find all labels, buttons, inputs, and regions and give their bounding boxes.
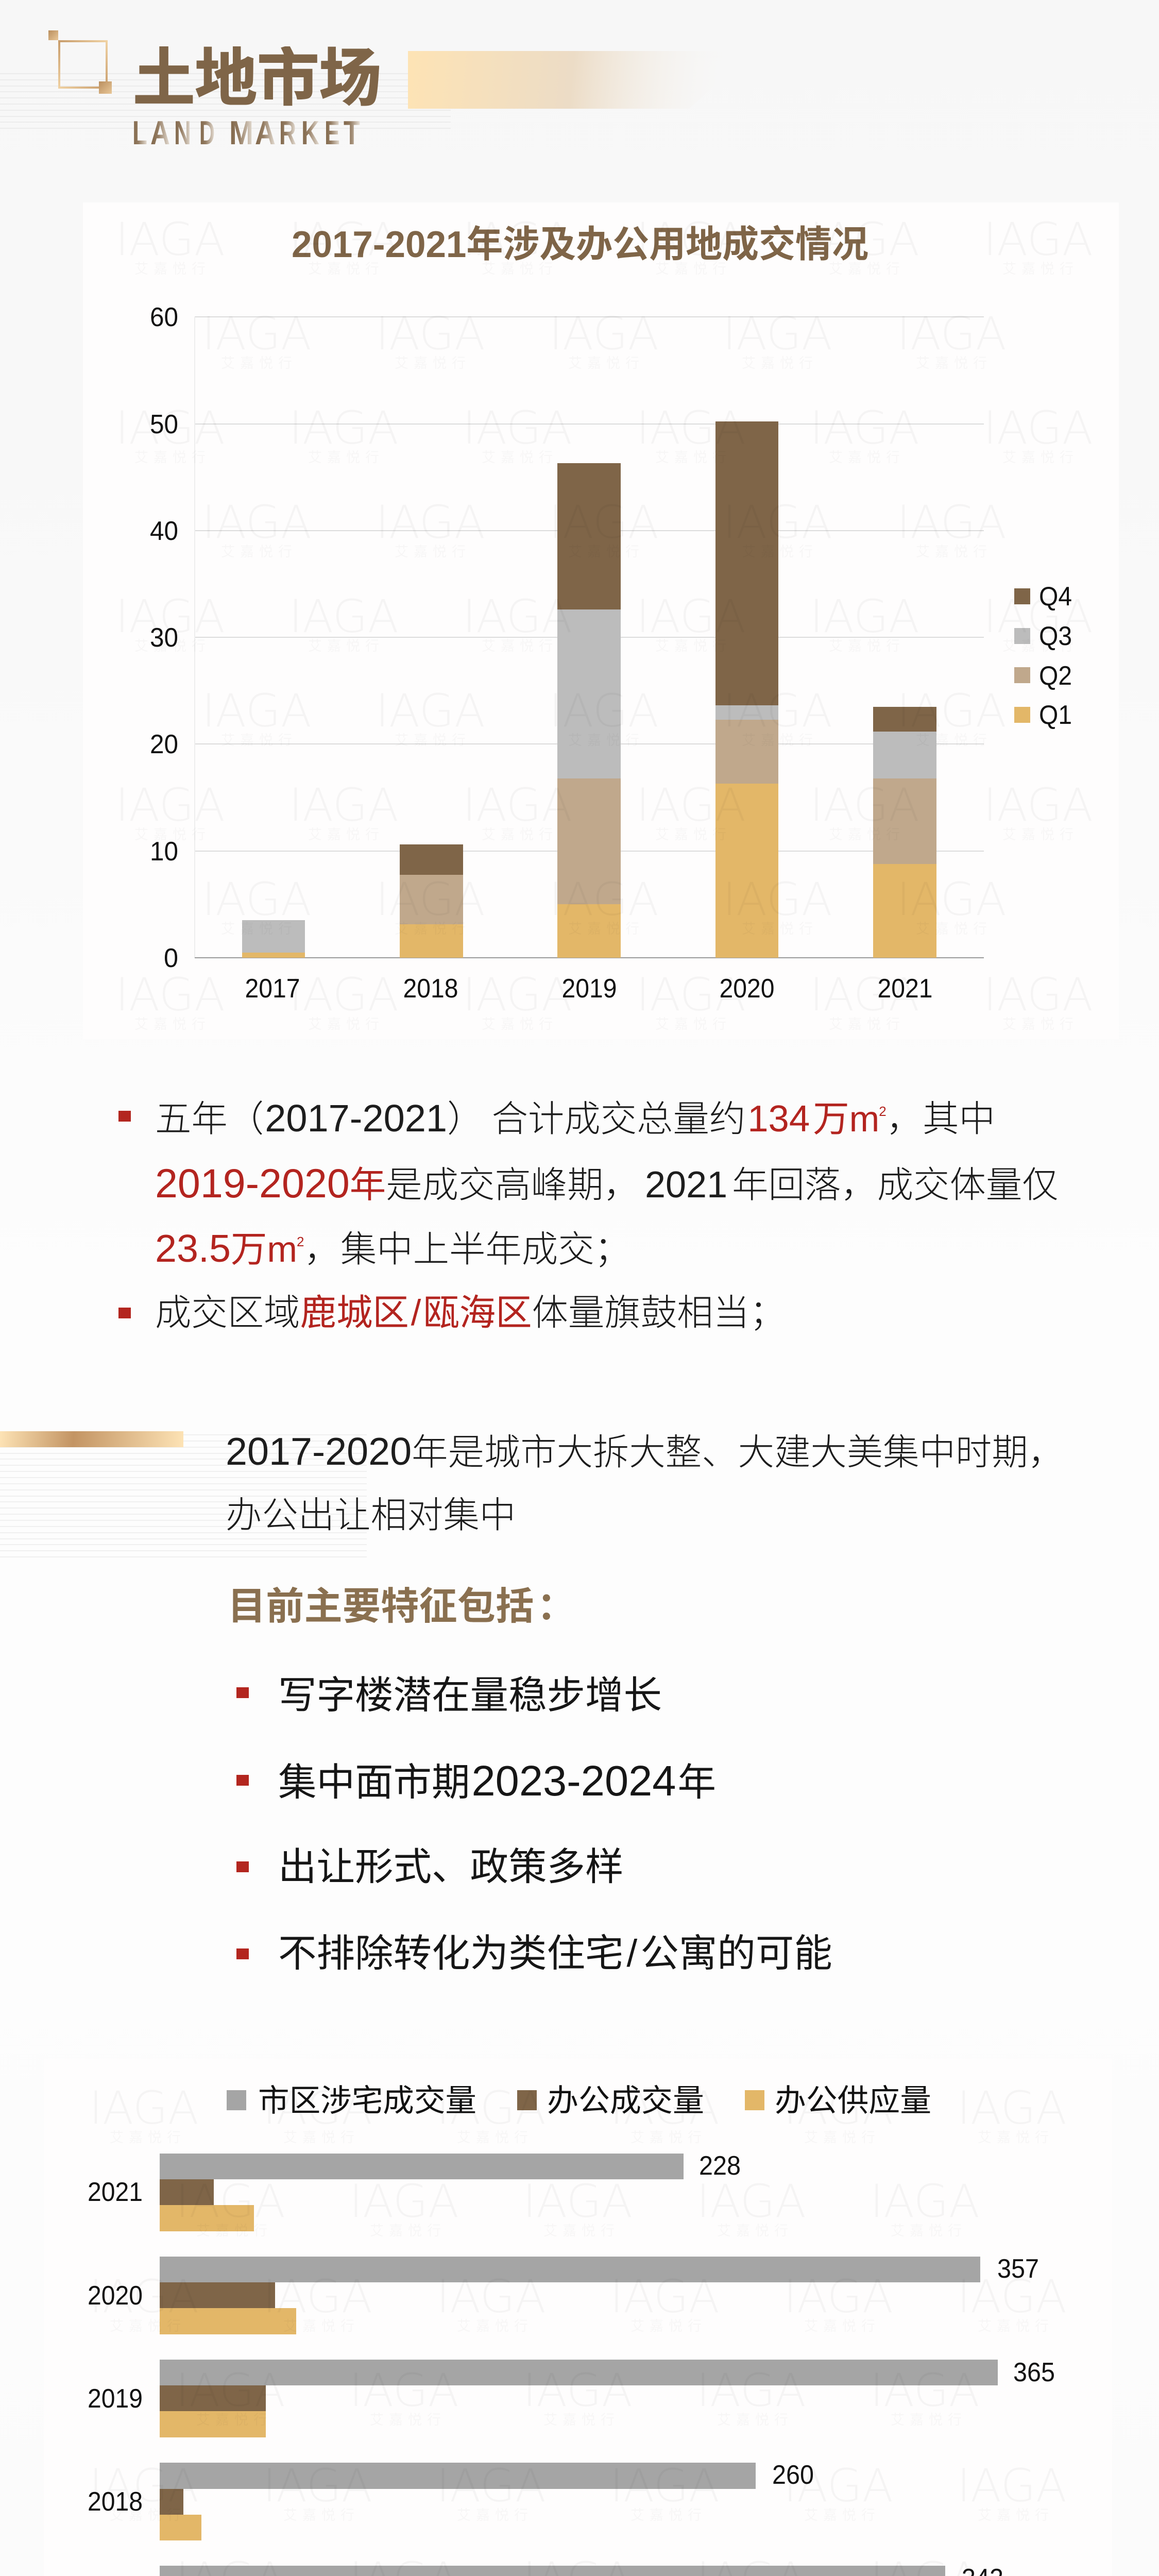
watermark: 艾嘉悦行: [829, 827, 905, 842]
watermark: IAGA: [723, 307, 832, 360]
watermark: 艾嘉悦行: [916, 921, 992, 937]
text block: intro: [226, 1430, 1064, 1535]
watermark: IAGA: [202, 873, 312, 926]
watermark: IAGA: [723, 684, 832, 737]
y axis labels: 30: [150, 623, 178, 653]
watermark: 艾嘉悦行: [395, 355, 471, 371]
bullet: [118, 1308, 131, 1318]
watermark: 艾嘉悦行: [568, 355, 644, 371]
watermark: 艾嘉悦行: [395, 544, 471, 560]
watermark: 艾嘉悦行: [655, 638, 731, 654]
list: main features: 写字楼潜在量稳步增长: [278, 1674, 662, 1717]
watermark: IAGA: [636, 968, 746, 1021]
watermark: IAGA: [783, 2081, 893, 2134]
watermark: 艾嘉悦行: [1002, 638, 1079, 654]
watermark: IAGA: [636, 778, 746, 832]
watermark: [89, 2081, 1067, 2576]
watermark: 艾嘉悦行: [110, 2507, 186, 2523]
watermark: IAGA: [983, 968, 1093, 1021]
watermark: IAGA: [549, 307, 659, 360]
watermark: IAGA: [983, 590, 1093, 643]
watermark: 艾嘉悦行: [655, 827, 731, 842]
watermark: 艾嘉悦行: [221, 355, 297, 371]
watermark: 艾嘉悦行: [568, 733, 644, 748]
watermark: [115, 213, 1093, 1032]
watermark: 艾嘉悦行: [308, 638, 384, 654]
watermark: IAGA: [289, 401, 399, 454]
y axis labels: 60: [150, 302, 178, 332]
watermark: 艾嘉悦行: [655, 450, 731, 465]
watermark: 艾嘉悦行: [742, 733, 818, 748]
x axis labels: 2018: [403, 974, 458, 1004]
watermark: IAGA: [115, 401, 225, 454]
watermark: 艾嘉悦行: [308, 1016, 384, 1032]
value labels: 228: [699, 2151, 741, 2181]
watermark: IAGA: [983, 401, 1093, 454]
watermark: IAGA: [263, 2081, 372, 2134]
watermark: 艾嘉悦行: [630, 2507, 707, 2523]
watermark: IAGA: [636, 401, 746, 454]
watermark: 艾嘉悦行: [395, 921, 471, 937]
watermark: 艾嘉悦行: [655, 1016, 731, 1032]
watermark: 艾嘉悦行: [829, 1016, 905, 1032]
watermark: 艾嘉悦行: [829, 261, 905, 277]
watermark: 艾嘉悦行: [717, 2223, 793, 2239]
watermark: IAGA: [636, 213, 746, 266]
watermark: IAGA: [289, 968, 399, 1021]
watermark: IAGA: [463, 590, 572, 643]
watermark: IAGA: [376, 496, 485, 549]
watermark: IAGA: [463, 401, 572, 454]
watermark: 艾嘉悦行: [742, 355, 818, 371]
watermark: 艾嘉悦行: [804, 2318, 880, 2334]
watermark: IAGA: [89, 2270, 199, 2323]
watermark: 艾嘉悦行: [742, 921, 818, 937]
x axis labels: [245, 974, 932, 1004]
watermark: IAGA: [89, 2459, 199, 2512]
watermark: 艾嘉悦行: [283, 2507, 360, 2523]
watermark: 艾嘉悦行: [829, 638, 905, 654]
watermark: IAGA: [810, 401, 919, 454]
watermark: IAGA: [202, 307, 312, 360]
watermark: IAGA: [463, 213, 572, 266]
watermark: IAGA: [176, 2175, 285, 2228]
watermark: IAGA: [436, 2270, 546, 2323]
watermark: IAGA: [810, 213, 919, 266]
watermark: IAGA: [549, 873, 659, 926]
watermark: IAGA: [957, 2459, 1067, 2512]
watermark: IAGA: [376, 684, 485, 737]
y axis labels: 20: [150, 730, 178, 759]
watermark: IAGA: [636, 590, 746, 643]
watermark: 艾嘉悦行: [916, 733, 992, 748]
watermark: IAGA: [289, 213, 399, 266]
watermark: IAGA: [810, 590, 919, 643]
watermark: 艾嘉悦行: [829, 450, 905, 465]
bar: 2017: [242, 920, 305, 958]
watermark: IAGA: [783, 2270, 893, 2323]
list: main features: [236, 1674, 832, 1975]
icon: gold frame: [48, 30, 112, 94]
value labels: 357: [997, 2254, 1039, 2284]
watermark: IAGA: [549, 684, 659, 737]
watermark: 艾嘉悦行: [1002, 261, 1079, 277]
x axis labels: 2020: [719, 974, 775, 1004]
watermark: IAGA: [463, 778, 572, 832]
watermark: 艾嘉悦行: [978, 2507, 1054, 2523]
watermark: 艾嘉悦行: [482, 450, 558, 465]
watermark: 艾嘉悦行: [196, 2223, 272, 2239]
bars: 2019: [160, 2360, 998, 2437]
watermark: IAGA: [870, 2364, 980, 2417]
watermark: 艾嘉悦行: [196, 2412, 272, 2428]
watermark: 艾嘉悦行: [134, 1016, 211, 1032]
legend: Q2: [1039, 661, 1072, 691]
section title: [132, 46, 381, 149]
bar: 2021: [873, 707, 936, 958]
watermark: IAGA: [202, 684, 312, 737]
watermark: 艾嘉悦行: [395, 733, 471, 748]
line 1: 五年（2017-2021）合计成交总量约134万m2，其中: [155, 1097, 995, 1140]
value labels: [699, 2151, 1055, 2576]
watermark: IAGA: [263, 2270, 372, 2323]
value labels: 260: [772, 2460, 814, 2490]
watermark: 艾嘉悦行: [482, 827, 558, 842]
line 4: 成交区域鹿城区/瓯海区体量旗鼓相当；: [155, 1292, 786, 1333]
legend: Q1: [1039, 700, 1072, 730]
y axis labels: 40: [150, 516, 178, 546]
watermark: 艾嘉悦行: [891, 2412, 967, 2428]
watermark: IAGA: [349, 2364, 459, 2417]
year labels: 2020: [88, 2281, 143, 2311]
watermark: 艾嘉悦行: [655, 261, 731, 277]
panel: horizontal bar chart: [88, 2081, 1067, 2576]
watermark: 艾嘉悦行: [308, 261, 384, 277]
watermark: 艾嘉悦行: [134, 261, 211, 277]
watermark: IAGA: [289, 778, 399, 832]
watermark: IAGA: [376, 307, 485, 360]
watermark: 艾嘉悦行: [630, 2318, 707, 2334]
list: main features: 出让形式、政策多样: [278, 1845, 624, 1888]
stripes 2: [0, 1434, 367, 1557]
chart title: 2017-2021年涉及办公用地成交情况: [292, 224, 868, 265]
watermark: IAGA: [115, 968, 225, 1021]
year labels: 2021: [88, 2177, 143, 2207]
watermark: 艾嘉悦行: [370, 2412, 446, 2428]
bar: 2019: [557, 463, 621, 958]
line 3: 23.5万m2，集中上半年成交；: [155, 1227, 630, 1270]
x axis labels: 2017: [245, 974, 300, 1004]
list: main features: 不排除转化为类住宅/公寓的可能: [278, 1932, 832, 1975]
watermark: 艾嘉悦行: [916, 355, 992, 371]
watermark: 艾嘉悦行: [717, 2412, 793, 2428]
watermark: IAGA: [263, 2459, 372, 2512]
bars: 2021: [160, 2154, 684, 2231]
watermark: IAGA: [463, 968, 572, 1021]
bars: 2018: [160, 2463, 756, 2540]
watermark: IAGA: [810, 968, 919, 1021]
gold accent bar: [0, 1431, 183, 1447]
watermark: 艾嘉悦行: [110, 2318, 186, 2334]
legend: [227, 2083, 931, 2118]
watermark: IAGA: [610, 2081, 720, 2134]
x axis labels: 2021: [878, 974, 932, 1004]
legend: Q3: [1039, 621, 1072, 651]
bar: 2020: [715, 421, 778, 958]
watermark: IAGA: [115, 778, 225, 832]
watermark: IAGA: [202, 496, 312, 549]
watermark: IAGA: [549, 496, 659, 549]
watermark: IAGA: [783, 2459, 893, 2512]
legend: Q4: [1039, 582, 1072, 612]
bars: 2017: [160, 2566, 945, 2576]
bars: 2020: [160, 2257, 980, 2334]
value labels: 365: [1013, 2358, 1055, 2387]
watermark: IAGA: [376, 873, 485, 926]
text block: intro: 办公出让相对集中: [226, 1495, 516, 1535]
watermark: 艾嘉悦行: [482, 261, 558, 277]
watermark: 艾嘉悦行: [134, 827, 211, 842]
bullet: [118, 1111, 131, 1122]
watermark: IAGA: [436, 2459, 546, 2512]
y axis labels: 50: [150, 410, 178, 439]
watermark: IAGA: [870, 2175, 980, 2228]
watermark: 艾嘉悦行: [568, 921, 644, 937]
text block: market summary: [118, 1097, 1059, 1333]
panel: stacked bar chart 2017-2021: [115, 213, 1093, 1032]
year labels: 2018: [88, 2487, 143, 2517]
watermark: IAGA: [897, 684, 1007, 737]
watermark: 艾嘉悦行: [742, 544, 818, 560]
watermark: IAGA: [610, 2270, 720, 2323]
watermark: IAGA: [957, 2081, 1067, 2134]
watermark: IAGA: [723, 496, 832, 549]
watermark: 艾嘉悦行: [134, 450, 211, 465]
y axis labels: 0: [164, 943, 178, 973]
watermark: IAGA: [810, 778, 919, 832]
watermark: 艾嘉悦行: [482, 638, 558, 654]
watermark: 艾嘉悦行: [457, 2507, 533, 2523]
legend: 办公供应量: [775, 2083, 931, 2118]
watermark: 艾嘉悦行: [457, 2130, 533, 2145]
watermark: IAGA: [983, 778, 1093, 832]
watermark: IAGA: [983, 213, 1093, 266]
watermark: IAGA: [957, 2270, 1067, 2323]
watermark: IAGA: [349, 2175, 459, 2228]
bar: 2018: [400, 844, 463, 958]
y axis labels: [150, 302, 178, 973]
watermark: 艾嘉悦行: [630, 2130, 707, 2145]
list: main features: 集中面市期2023-2024年: [278, 1757, 716, 1805]
watermark: 艾嘉悦行: [978, 2318, 1054, 2334]
watermark: 艾嘉悦行: [543, 2223, 620, 2239]
y axis labels: 10: [150, 837, 178, 867]
watermark: IAGA: [696, 2364, 806, 2417]
text block: intro: 2017-2020年是城市大拆大整、大建大美集中时期，: [226, 1430, 1064, 1473]
header stripes: [0, 73, 451, 129]
legend: 市区涉宅成交量: [258, 2083, 476, 2118]
watermark: IAGA: [897, 496, 1007, 549]
watermark: IAGA: [523, 2175, 633, 2228]
watermark: 艾嘉悦行: [804, 2130, 880, 2145]
legend: 办公成交量: [547, 2083, 704, 2118]
watermark: 艾嘉悦行: [543, 2412, 620, 2428]
watermark: 艾嘉悦行: [457, 2318, 533, 2334]
watermark: IAGA: [289, 590, 399, 643]
watermark: IAGA: [897, 873, 1007, 926]
watermark: 艾嘉悦行: [221, 544, 297, 560]
watermark: IAGA: [115, 590, 225, 643]
watermark: 艾嘉悦行: [891, 2223, 967, 2239]
watermark: 艾嘉悦行: [308, 450, 384, 465]
watermark: 艾嘉悦行: [110, 2130, 186, 2145]
heading: main features: 目前主要特征包括：: [228, 1585, 575, 1628]
watermark: IAGA: [115, 213, 225, 266]
line 2: 2019-2020年是成交高峰期，2021年回落，成交体量仅: [155, 1160, 1059, 1206]
watermark: 艾嘉悦行: [283, 2318, 360, 2334]
header gold bar: [408, 51, 670, 109]
watermark: 艾嘉悦行: [916, 544, 992, 560]
watermark: IAGA: [176, 2364, 285, 2417]
watermark: 艾嘉悦行: [134, 638, 211, 654]
watermark: 艾嘉悦行: [1002, 450, 1079, 465]
watermark: IAGA: [610, 2459, 720, 2512]
watermark: IAGA: [436, 2081, 546, 2134]
watermark: IAGA: [523, 2364, 633, 2417]
legend: [1014, 582, 1072, 730]
year labels: [88, 2177, 143, 2576]
watermark: IAGA: [696, 2175, 806, 2228]
watermark: 艾嘉悦行: [1002, 1016, 1079, 1032]
watermark: 艾嘉悦行: [804, 2507, 880, 2523]
watermark: IAGA: [723, 873, 832, 926]
watermark: 艾嘉悦行: [308, 827, 384, 842]
watermark: IAGA: [89, 2081, 199, 2134]
year labels: 2019: [88, 2384, 143, 2414]
watermark: 艾嘉悦行: [370, 2223, 446, 2239]
watermark: 艾嘉悦行: [283, 2130, 360, 2145]
watermark: 艾嘉悦行: [482, 1016, 558, 1032]
watermark: IAGA: [897, 307, 1007, 360]
watermark: 艾嘉悦行: [568, 544, 644, 560]
watermark: 艾嘉悦行: [978, 2130, 1054, 2145]
watermark: 艾嘉悦行: [221, 733, 297, 748]
x axis labels: 2019: [561, 974, 617, 1004]
watermark: 艾嘉悦行: [1002, 827, 1079, 842]
watermark: 艾嘉悦行: [221, 921, 297, 937]
